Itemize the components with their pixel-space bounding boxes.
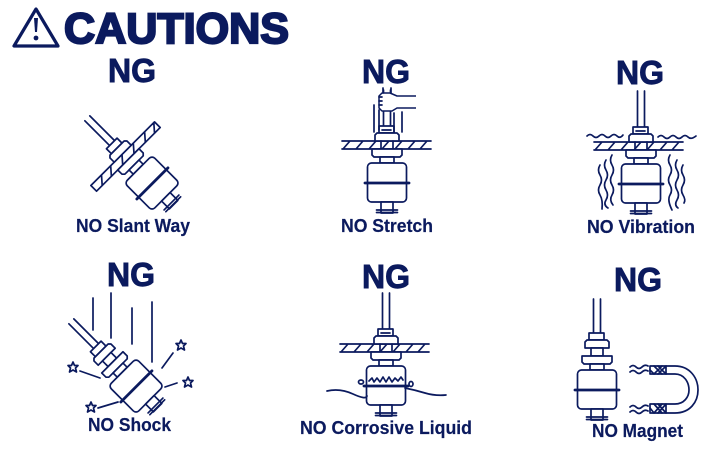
caption: NO Magnet (592, 420, 683, 441)
caption: NO Shock (88, 414, 172, 435)
panel: no slant way (56, 52, 205, 236)
panel: no stretch (341, 53, 433, 236)
panel: no corrosive liquid (300, 258, 472, 438)
heading: NG: NG (614, 261, 662, 298)
caption: NO Vibration (587, 216, 695, 237)
caption: NO Stretch (341, 215, 433, 236)
heading: NG: NG (616, 54, 664, 91)
diagram: slanted sensor (56, 87, 205, 236)
caption: NO Corrosive Liquid (300, 417, 472, 438)
diagram: sensor near magnet (575, 299, 698, 420)
heading: NG: NG (108, 52, 156, 89)
panel: no vibration (587, 54, 696, 237)
panel: no shock (56, 256, 193, 435)
heading: NG: NG (362, 53, 410, 90)
diagram: sensor in corrosive liquid (327, 293, 446, 416)
diagram: sensor impact (56, 293, 193, 423)
heading: NG: NG (107, 256, 155, 293)
title: CAUTIONS (64, 5, 289, 53)
diagram: vibrating sensor (587, 91, 696, 214)
panel: no magnet (575, 261, 698, 441)
icon: warning triangle (14, 9, 58, 46)
heading: NG: NG (362, 258, 410, 295)
caption: NO Slant Way (76, 215, 191, 236)
diagram: sensor with pulling hand (342, 88, 431, 213)
